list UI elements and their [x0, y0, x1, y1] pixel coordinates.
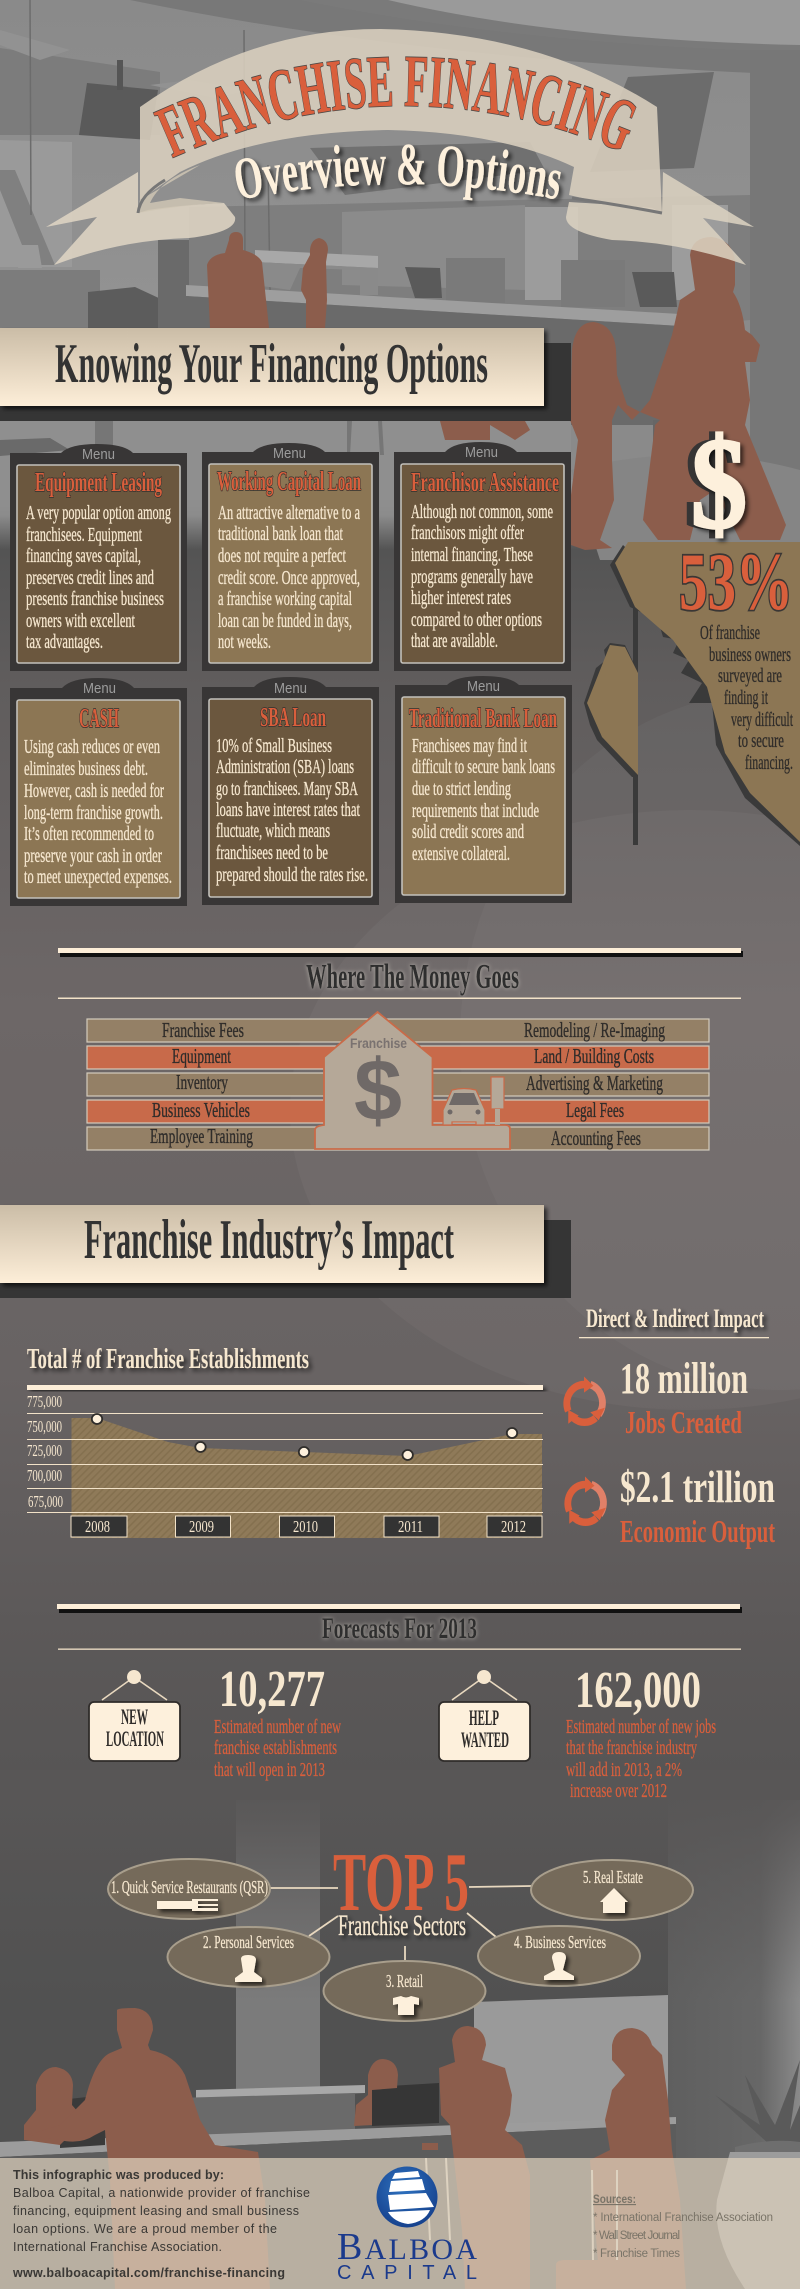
- sector 3: retail: [324, 1961, 486, 2021]
- stat description: [566, 1716, 716, 1802]
- y axis labels: 725,000: [27, 1441, 62, 1460]
- panel: SBA Loan: SBA Loan: [260, 702, 326, 732]
- panel: SBA Loan: Administration (SBA) loans: [216, 756, 354, 778]
- expense labels: Employee Training: [150, 1124, 253, 1148]
- panel: Franchisor Assistance: [394, 442, 571, 671]
- panel: Equipment Leasing: presents franchise business: [26, 588, 164, 610]
- panel: footer: [0, 2158, 800, 2289]
- icon: hanging sign help wanted: HELP: [469, 1705, 499, 1730]
- panel: Working Capital Loan: a franchise working capital: [218, 588, 352, 610]
- stat description: that the franchise industry: [566, 1737, 697, 1759]
- panel: Working Capital Loan: does not require a perfect: [218, 545, 346, 567]
- heading: Top 5: TOP 5: [333, 1836, 469, 1929]
- expense labels: Equipment: [172, 1044, 231, 1068]
- panel: SBA Loan: franchisees need to be: [216, 842, 328, 864]
- expense labels: Land / Building Costs: [534, 1044, 654, 1068]
- panel: Traditional Bank Loan: Franchisees may find it: [412, 735, 527, 757]
- panel: SBA Loan: loans have interest rates that: [216, 799, 360, 821]
- panel: Cash: It’s often recommended to: [24, 823, 154, 845]
- sector 4: business services: 4. Business Services: [514, 1932, 606, 1952]
- people silhouettes at the counter: [207, 232, 786, 550]
- icon: hanging sign help wanted: WANTED: [461, 1727, 509, 1752]
- panel: new location forecast: [89, 1661, 341, 1781]
- expense labels: Legal Fees: [566, 1098, 624, 1122]
- panel: Working Capital Loan: not weeks.: [218, 631, 271, 653]
- panel: Cash: CASH: [79, 703, 119, 733]
- panel: Equipment Leasing: [10, 444, 187, 671]
- panel: Traditional Bank Loan: Menu: [467, 678, 500, 695]
- producer text: financing, equipment leasing and small business: [13, 2204, 299, 2218]
- panel: Working Capital Loan: traditional bank loan that: [218, 523, 343, 545]
- panel: Working Capital Loan: Menu: [273, 445, 306, 462]
- panel: Cash: However, cash is needed for: [24, 780, 164, 802]
- sector 1: quick service restaurants: [108, 1859, 270, 1919]
- stat description: [700, 622, 793, 774]
- expense labels: Inventory: [176, 1070, 228, 1094]
- y axis labels: 675,000: [28, 1492, 63, 1511]
- panel: Franchisor Assistance: programs generally have: [411, 566, 533, 588]
- panel: Cash: long-term franchise growth.: [24, 802, 163, 824]
- sector 5: real estate: [531, 1860, 693, 1920]
- area chart: [72, 1418, 542, 1538]
- icon: recycle arrows: [568, 1477, 606, 1524]
- sector 2: personal services: 2. Personal Services: [203, 1932, 294, 1952]
- stat description: will add in 2013, a 2%: [566, 1759, 682, 1781]
- icon: hanging sign new location: NEW: [121, 1704, 148, 1729]
- connector lines: [270, 1886, 531, 1960]
- panel: Franchisor Assistance: Although not common, some: [411, 501, 553, 523]
- heading: Knowing Your Financing Options: [0, 328, 571, 421]
- panel: SBA Loan: 10% of Small Business: [216, 735, 332, 757]
- stat description: that will open in 2013: [214, 1759, 325, 1781]
- title banner: [46, 29, 754, 265]
- icon: franchise building: Franchise: [350, 1035, 407, 1051]
- panel: Cash: eliminates business debt.: [24, 758, 148, 780]
- year labels: 2008: [85, 1517, 110, 1536]
- panel: Equipment Leasing: franchisees. Equipment: [26, 524, 142, 546]
- panel: Traditional Bank Loan: difficult to secure bank loans: [412, 756, 555, 778]
- panel: Traditional Bank Loan: due to strict lending: [412, 778, 511, 800]
- data points: [92, 1414, 517, 1460]
- stat: 18 million jobs: Jobs Created: [625, 1404, 742, 1440]
- expense labels: Advertising & Marketing: [526, 1071, 663, 1095]
- panel: top 5 franchise sectors: [108, 1836, 693, 2021]
- icon: dollar sign: $: [691, 412, 747, 556]
- panel: SBA Loan: prepared should the rates rise.: [216, 864, 368, 886]
- expense labels: Business Vehicles: [152, 1098, 250, 1122]
- y axis labels: [27, 1392, 63, 1511]
- sector 5: real estate: 5. Real Estate: [583, 1867, 643, 1887]
- callout: 53 percent on map: [584, 412, 800, 846]
- icon: hanging sign new location: [89, 1670, 180, 1761]
- stat description: [214, 1716, 341, 1781]
- panel: Franchisor Assistance: higher interest rates: [411, 587, 511, 609]
- panel: SBA Loan: go to franchisees. Many SBA: [216, 778, 358, 800]
- expense labels: Accounting Fees: [551, 1126, 641, 1150]
- subtitle: Overview & Options: Overview & Options: [235, 144, 566, 206]
- y axis labels: 750,000: [27, 1417, 62, 1436]
- stat description: increase over 2012: [570, 1780, 667, 1802]
- panel: Traditional Bank Loan: extensive collateral.: [412, 843, 510, 865]
- stat: 162,000: 162,000: [575, 1662, 701, 1719]
- stat description: Of franchise: [700, 622, 760, 644]
- heading: Where The Money Goes: Where The Money Goes: [306, 957, 519, 996]
- panel: Cash: Using cash reduces or even: [24, 736, 160, 758]
- heading: Franchise Industry's Impact: [0, 1205, 571, 1298]
- map shape: [584, 542, 800, 846]
- icon: hanging sign new location: LOCATION: [106, 1726, 164, 1751]
- panel: Working Capital Loan: [202, 443, 379, 671]
- panel: Cash: to meet unexpected expenses.: [24, 866, 172, 888]
- heading: Franchise Industry's Impact: Franchise Industry’s Impact: [84, 1209, 454, 1271]
- icon: hanging sign help wanted: [439, 1670, 530, 1761]
- panel: direct and indirect impact: [567, 1304, 775, 1549]
- panel: Working Capital Loan: credit score. Once approved,: [218, 567, 360, 589]
- plant and planter: [426, 2060, 800, 2289]
- stat: 18 million jobs: [620, 1354, 748, 1440]
- panel: Traditional Bank Loan: solid credit scores and: [412, 821, 524, 843]
- y axis labels: 700,000: [27, 1466, 62, 1485]
- chart heading: Total # of Franchise Establishments: [27, 1344, 309, 1375]
- title: Franchise Financing: FRANCHISE FINANCING: [152, 56, 636, 158]
- producer text: [12, 2168, 310, 2280]
- panel: Equipment Leasing: Menu: [82, 446, 115, 463]
- expense labels: [150, 1018, 665, 1150]
- panel: help wanted forecast: [439, 1662, 716, 1802]
- panel: Equipment Leasing: tax advantages.: [26, 631, 103, 653]
- panel: Working Capital Loan: loan can be funded in days,: [218, 610, 352, 632]
- panel: SBA Loan: Menu: [274, 680, 307, 697]
- icon: recycle arrows: [567, 1377, 605, 1424]
- sources: Sources:: [593, 2194, 636, 2206]
- people silhouettes at the front desk: [24, 2008, 686, 2289]
- panel: Equipment Leasing: financing saves capital,: [26, 545, 141, 567]
- sources: * Franchise Times: [593, 2248, 680, 2260]
- expense labels: Remodeling / Re-Imaging: [524, 1018, 665, 1042]
- y axis labels: 775,000: [27, 1392, 62, 1411]
- stat description: franchise establishments: [214, 1737, 337, 1759]
- heading: Where The Money Goes: [58, 948, 743, 999]
- sector 2: personal services: [168, 1927, 330, 1987]
- producer text: Balboa Capital, a nationwide provider of franchise: [13, 2186, 310, 2200]
- banner ribbon: [46, 29, 754, 265]
- producer text: This infographic was produced by:: [13, 2168, 224, 2182]
- panel: Working Capital Loan: An attractive alternative to a: [218, 502, 360, 524]
- panel: total franchise establishments chart: [27, 1344, 543, 1538]
- panel: Franchisor Assistance: Menu: [465, 444, 498, 461]
- panel: Traditional Bank Loan: requirements that include: [412, 800, 539, 822]
- sector 1: quick service restaurants: 1. Quick Service Restaurants (QSR): [111, 1877, 268, 1898]
- panel: Traditional Bank Loan: [395, 676, 572, 903]
- producer text: www.balboacapital.com/franchise-financing: [12, 2266, 285, 2280]
- chart: where the money goes: [87, 1012, 709, 1150]
- panel: Equipment Leasing: preserves credit lines and: [26, 567, 154, 589]
- logo: Balboa Capital: [337, 2166, 477, 2284]
- stat description: finding it: [724, 687, 768, 709]
- year labels: 2012: [501, 1517, 526, 1536]
- year labels: 2010: [293, 1517, 318, 1536]
- sector 3: retail: 3. Retail: [386, 1971, 423, 1991]
- subheading: Franchise Sectors: Franchise Sectors: [338, 1909, 466, 1942]
- year labels: 2011: [398, 1517, 423, 1536]
- sources: [593, 2194, 773, 2260]
- panel: Working Capital Loan: Working Capital Loan: [217, 466, 361, 496]
- heading: Forecasts For 2013: [57, 1604, 742, 1650]
- producer text: loan options. We are a proud member of the: [13, 2222, 277, 2236]
- panel: Equipment Leasing: owners with excellent: [26, 610, 135, 632]
- sources: * Wall Street Journal: [593, 2230, 680, 2242]
- expense bars: [87, 1019, 709, 1150]
- expense labels: Franchise Fees: [162, 1018, 244, 1042]
- icon: dollar sign: $: [684, 412, 742, 556]
- stat: 2.1 trillion output: [620, 1461, 775, 1549]
- icon: franchise building: [315, 1012, 510, 1149]
- year labels: 2009: [189, 1517, 214, 1536]
- logo: Balboa Capital: CAPITAL: [337, 2262, 477, 2284]
- year labels: [71, 1516, 542, 1537]
- panel: Franchisor Assistance: that are available.: [411, 630, 498, 652]
- grid lines: [27, 1413, 543, 1513]
- panel: Equipment Leasing: A very popular option among: [26, 502, 171, 524]
- panel: Equipment Leasing: Equipment Leasing: [35, 467, 162, 497]
- producer text: International Franchise Association.: [13, 2240, 222, 2254]
- panel: Cash: preserve your cash in order: [24, 845, 162, 867]
- icon: franchise building: $: [354, 1042, 402, 1139]
- panel: Cash: [10, 678, 187, 906]
- panel: SBA Loan: [202, 677, 379, 905]
- panel: Franchisor Assistance: franchisors might offer: [411, 522, 524, 544]
- heading: Forecasts For 2013: Forecasts For 2013: [322, 1612, 477, 1645]
- stat description: Estimated number of new: [214, 1716, 341, 1738]
- panel: Cash: Menu: [83, 680, 116, 697]
- panel: Traditional Bank Loan: Traditional Bank Loan: [409, 703, 557, 733]
- panel: SBA Loan: fluctuate, which means: [216, 820, 330, 842]
- stat: 10,277: 10,277: [219, 1661, 325, 1718]
- panel: Franchisor Assistance: internal financing. These: [411, 544, 533, 566]
- panel: Franchisor Assistance: Franchisor Assistance: [411, 467, 559, 497]
- panel: Franchisor Assistance: compared to other options: [411, 609, 542, 631]
- sector 4: business services: [478, 1926, 640, 1986]
- logo: Balboa Capital: BALBOA: [337, 2226, 477, 2268]
- sources: * International Franchise Association: [593, 2212, 773, 2224]
